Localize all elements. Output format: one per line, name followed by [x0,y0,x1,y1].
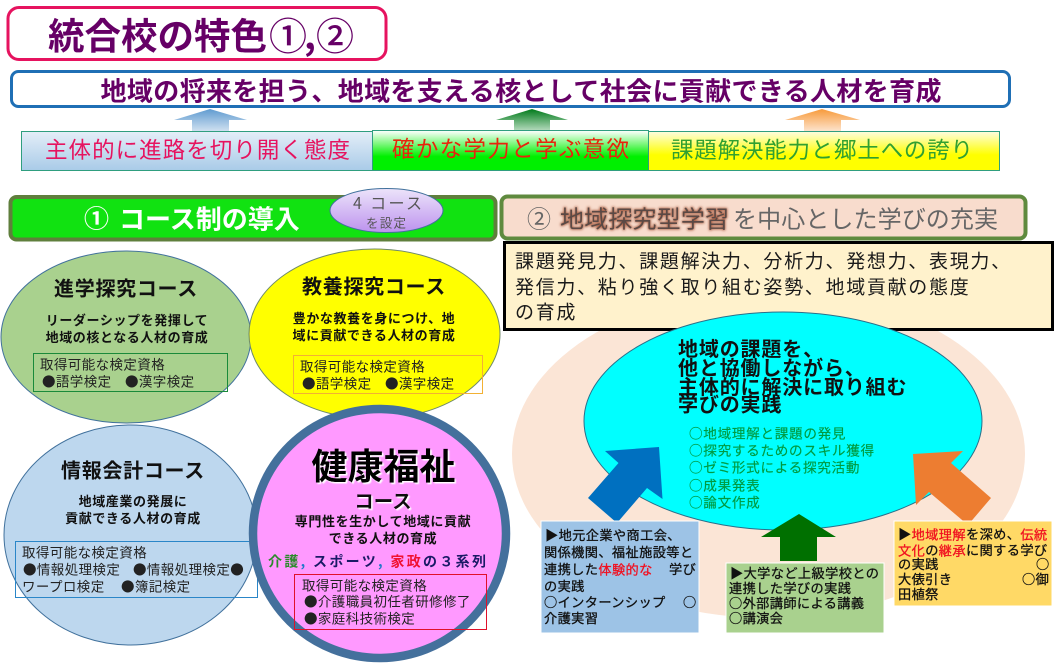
attribute: independent attitude: 主体的に進路を切り開く態度 [45,133,350,165]
partner box: local culture: ○ [1036,554,1050,573]
course description [295,511,471,547]
certificates [34,354,228,392]
title: 統合校の特色 [48,6,267,60]
certificates: ●介護職員初任者研修修了 [304,590,471,610]
partner box: universities: ○講演会 [729,608,783,627]
partner box: local culture: ○御 [1022,569,1049,588]
partner box: community: の実践 [544,576,585,595]
arrow: orange up [785,109,860,131]
goal banner: 地域の将来を担う、地域を支える核として社会に貢献できる人材を育成 [100,72,942,108]
course: academic inquiry [1,251,251,423]
certificates: ●漢字検定 [125,370,194,390]
partner box: community: ○インターンシップ [544,592,666,611]
course description: 地域の核となる人材の育成 [46,327,208,346]
three tracks: 介護, スポーツ, 家政の３系列 [268,552,486,572]
central statement [678,333,907,418]
section heading 2 [502,196,1026,238]
section heading 1: ① [84,200,109,236]
skills box: 発信力、粘り強く取り組む姿勢、地域貢献の態度 [515,272,970,300]
certificates: ●家庭科技術検定 [304,608,415,628]
course description: 豊かな教養を身につけ、地 [293,308,455,327]
partner box: local culture: 文化の継承に関する学び [898,540,1048,559]
title [8,6,386,60]
activity list: ○成果発表 [689,474,760,494]
certificates: 取得可能な検定資格 [22,542,147,562]
course title: 進学探究コース [54,272,198,302]
circled number: ② [527,200,551,234]
activity list: ○地域理解と課題の発見 [689,422,846,442]
partner box: community: 介護実習 [544,608,598,627]
course: liberal arts inquiry [249,249,500,419]
highlighted phrase: 地域探究型学習 [560,200,729,234]
course description: 域に貢献できる人材の育成 [293,325,455,344]
skills box: の育成 [515,298,577,324]
partner box: community: ○ [683,592,697,611]
central statement: 主体的に解決に取り組む [678,371,907,400]
partner box: local culture: 大俵引き [898,569,952,588]
skills box [504,242,1052,330]
partner box: community: ▶地元企業や商工会、 [545,525,681,544]
attribute: solid scholarship: 確かな学力と学ぶ意欲 [392,132,629,164]
partner box: universities [726,563,884,633]
partner box: universities: 連携した学びの実践 [729,578,851,597]
title: , [304,6,316,60]
section heading 1 [10,197,496,240]
course description [293,308,455,344]
central statement: 学びの実践 [678,388,782,418]
course description: リーダーシップを発揮して [46,310,208,329]
course description [46,310,208,346]
central statement: 他と協働しながら、 [678,352,866,381]
arrow: blue up [174,109,247,131]
arrow: green up [496,109,568,131]
certificates [16,542,258,598]
course description: 専門性を生かして地域に貢献 [295,511,471,530]
certificates [294,574,486,630]
partner box: local culture: ▶地域理解を深め、伝統 [898,524,1048,543]
partner box: community [541,521,699,633]
activity list: ○ゼミ形式による探究活動 [689,456,860,476]
heading remainder: を中心とした学びの充実 [733,200,998,234]
certificates: 取得可能な検定資格 [302,574,427,594]
course: information accounting [4,425,258,645]
partner box: universities: ▶大学など上級学校との [730,563,879,582]
section heading 1: コース制の導入 [119,199,300,236]
certificates: ●語学検定 [302,372,372,392]
partner box: local culture: の実践 [898,554,939,573]
partner box: community: 連携した体験的な [544,559,653,578]
skills box: 課題発見力、課題解決力、分析力、発想力、表現力、 [515,246,1012,274]
course description: 貢献できる人材の育成 [65,508,201,527]
course title: 情報会計コース [61,454,205,484]
certificates: ●情報処理検定 [23,558,120,578]
certificates: ●漢字検定 [385,372,454,392]
course description: 地域産業の発展に [79,491,187,510]
certificates: 取得可能な検定資格 [300,356,425,376]
course subtitle: コース [354,485,412,514]
certificates: ●情報処理検定● [133,558,244,578]
backdrop ellipse [512,290,1025,618]
course description [65,491,201,527]
certificates: 取得可能な検定資格 [40,354,165,374]
activity list [689,422,875,512]
title: ① [269,6,307,60]
certificates [294,356,482,394]
course: health and welfare [253,409,506,658]
badge: four courses: を設定 [366,212,406,232]
course title: 健康福祉 [311,438,456,490]
certificates: ●簿記検定 [121,576,190,596]
partner box: local culture: 田植祭 [898,584,939,603]
partner box: local culture [894,521,1052,606]
partner box: community: 関係機関、福祉施設等と [544,542,693,561]
arrow: orange diagonal [913,451,991,525]
title: ② [316,6,354,60]
partner box: universities: ○外部講師による講義 [729,593,864,612]
central ellipse [584,312,982,530]
attribute: problem solving: 課題解決能力と郷土への誇り [671,133,973,165]
activity list: ○論文作成 [689,492,760,512]
activity list: ○探究するためのスキル獲得 [689,440,875,460]
badge: four courses: 4 コース [353,190,422,214]
central statement: 地域の課題を、 [678,333,824,362]
arrow: blue diagonal [588,447,662,523]
certificates: ●語学検定 [42,370,112,390]
badge: four courses [330,188,443,232]
partner box: community: 学び [669,559,696,578]
course description: できる人材の育成 [329,528,437,547]
certificates: ワープロ検定 [22,576,105,596]
attribute: solid scholarship [372,130,648,170]
arrow: green up to ellipse [761,514,836,561]
course title: 教養探究コース [302,270,446,300]
